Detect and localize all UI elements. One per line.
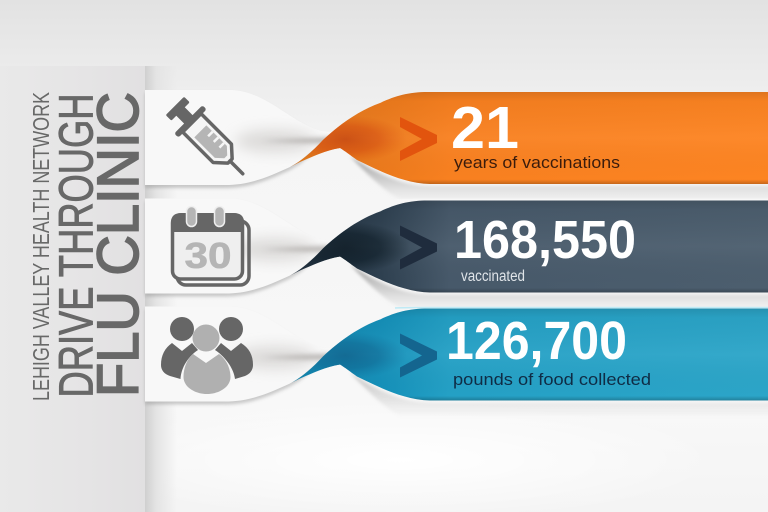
label: pounds of food collected	[453, 370, 651, 389]
ribbon edge shading	[290, 308, 768, 400]
bottom glow	[80, 400, 720, 512]
title line: flu clinic: FLU CLINIC	[86, 92, 151, 397]
label: vaccinated	[461, 268, 525, 285]
ribbon shadow	[350, 264, 768, 308]
highlight line	[395, 306, 768, 309]
value: 126,700	[446, 311, 627, 371]
chevron	[400, 226, 437, 270]
title	[28, 91, 151, 401]
value: 168,550	[454, 210, 636, 270]
panel shadow	[145, 66, 177, 512]
white fold shadow	[145, 93, 334, 188]
twist shading	[290, 200, 768, 292]
ribbon shadow	[350, 372, 768, 416]
fold crease	[235, 346, 330, 368]
ribbon 2: vaccinated	[145, 198, 768, 308]
chevron	[400, 334, 437, 378]
twist shading	[290, 92, 768, 184]
ribbon shadow	[350, 156, 768, 199]
blue ribbon	[290, 308, 768, 400]
icon: group of people	[161, 317, 253, 394]
white fold shadow	[145, 310, 334, 404]
title line: organisation: LEHIGH VALLEY HEALTH NETWORK	[28, 91, 54, 401]
fold crease	[235, 130, 330, 152]
calendar date: 30	[184, 235, 232, 276]
label: years of vaccinations	[454, 154, 620, 172]
navy ribbon	[290, 200, 768, 292]
ribbon 1: years of vaccinations	[145, 90, 768, 199]
icon: calendar	[171, 206, 249, 285]
icon: syringe	[161, 92, 257, 188]
value: 21	[451, 95, 519, 161]
white ribbon fold	[145, 306, 334, 402]
ribbon edge shading	[290, 92, 768, 184]
white fold shadow	[145, 202, 334, 296]
ribbon 3: pounds of food collected	[145, 306, 768, 416]
title line: drive through: DRIVE THROUGH	[50, 94, 104, 398]
white ribbon fold	[145, 198, 334, 294]
white ribbon fold	[145, 90, 334, 185]
orange ribbon	[290, 92, 768, 184]
highlight line	[395, 198, 768, 201]
fold crease	[235, 238, 330, 260]
left title panel	[0, 66, 145, 512]
twist shading	[290, 308, 768, 400]
chevron	[400, 117, 437, 161]
ribbon edge shading	[290, 200, 768, 292]
